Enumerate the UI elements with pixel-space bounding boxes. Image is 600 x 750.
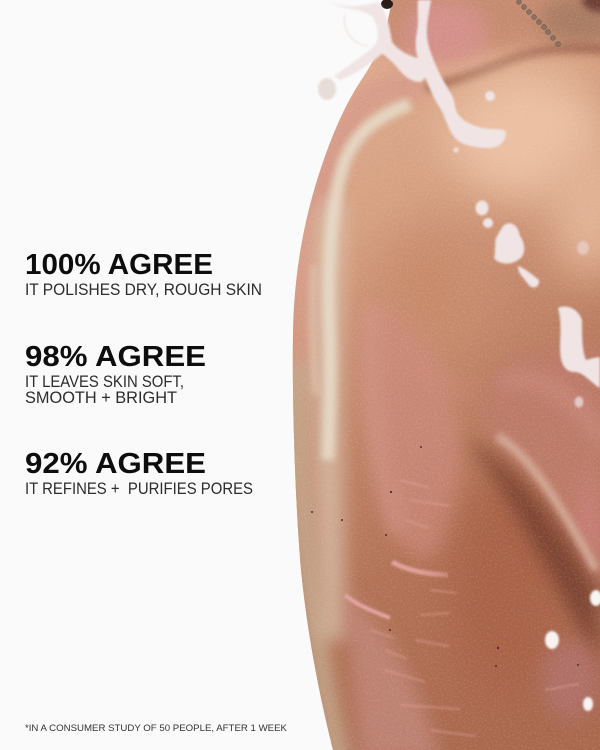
- stat 3: [25, 448, 253, 498]
- stat 3 heading: 92% AGREE: [25, 448, 206, 480]
- lower left beige edge: [297, 360, 342, 750]
- skin grain: [290, 0, 600, 750]
- mid arm warm tone: [388, 236, 452, 303]
- stat 2 description: SMOOTH + BRIGHT: [25, 389, 177, 407]
- dark specks: [311, 446, 579, 667]
- stat 1: [25, 249, 262, 299]
- drop far left: [318, 78, 336, 100]
- pink exfoliation patch: [344, 306, 463, 750]
- footnote: *IN A CONSUMER STUDY OF 50 PEOPLE, AFTER 1 WEEK: [25, 723, 288, 734]
- pale wash behind streak: [328, 200, 334, 640]
- stat 2 description: [25, 373, 184, 407]
- light scrub rim above crease: [497, 436, 596, 570]
- shoulder droplets: [485, 91, 495, 101]
- shoulder highlight: [445, 70, 600, 200]
- forearm above armpit: [489, 352, 600, 559]
- photo: shoulder and arm: [290, 0, 600, 750]
- stat 2 description: IT LEAVES SKIN SOFT,: [25, 373, 184, 391]
- splash ring: [344, 15, 368, 46]
- splash: cream drops and streams: [318, 0, 600, 711]
- pink bands left: [295, 216, 308, 357]
- left splash: [328, 0, 426, 82]
- stat 1 heading: 100% AGREE: [25, 249, 213, 281]
- pink upper shoulder edge: [312, 85, 425, 215]
- main stream: [416, 0, 506, 148]
- neck tone: [380, 0, 600, 64]
- armpit crease shadow: [474, 440, 600, 660]
- cream scrub streak: [328, 104, 410, 460]
- necklace: [517, 0, 560, 46]
- lower right pink patch: [542, 640, 598, 720]
- stat 2 heading: 98% AGREE: [25, 341, 206, 373]
- deep arm tone: [450, 480, 560, 700]
- shoulder crease shadow: [425, 48, 600, 88]
- arm base silhouette: [293, 0, 600, 750]
- stat 3 description: IT REFINES + PURIFIES PORES: [25, 480, 253, 498]
- hair at neck: [381, 0, 393, 9]
- stat 2: [25, 341, 206, 407]
- scrub dashes: [370, 480, 579, 736]
- stat 1 description: IT POLISHES DRY, ROUGH SKIN: [25, 281, 262, 299]
